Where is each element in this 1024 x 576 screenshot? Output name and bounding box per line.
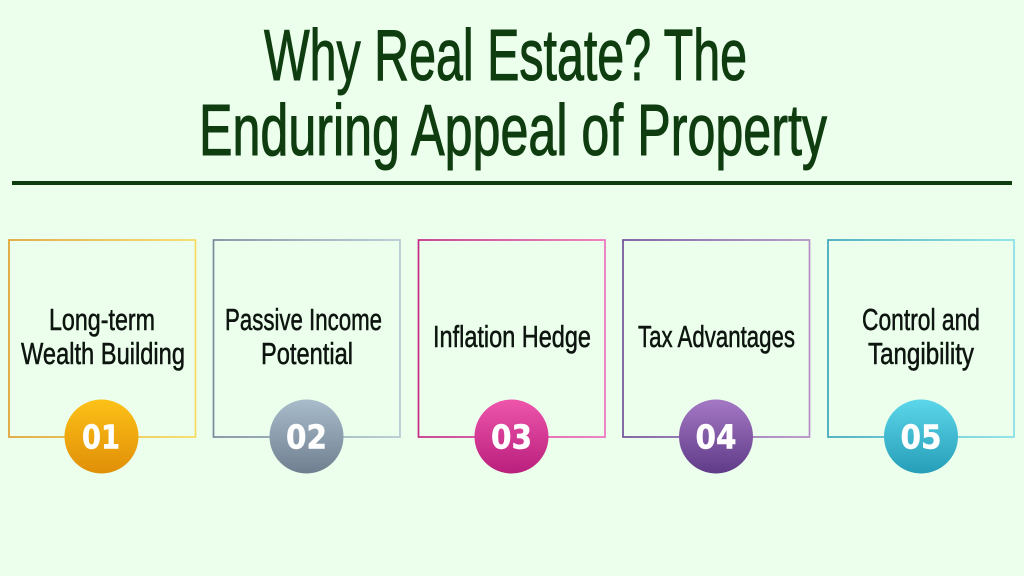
card text 5: Tangibility <box>868 336 974 371</box>
card border 4 <box>623 240 810 437</box>
number badge 02 <box>270 400 344 474</box>
card text 4: Tax Advantages <box>638 319 795 354</box>
panel: inflation hedge <box>418 240 605 474</box>
card text 3: Inflation Hedge <box>433 319 591 354</box>
card text 2: Passive Income <box>225 302 382 337</box>
number badge 01: 01 <box>82 418 120 456</box>
number badge 03: 03 <box>491 418 532 456</box>
card border 2 <box>214 240 400 437</box>
number badge 05: 05 <box>900 418 942 456</box>
number badge 02: 02 <box>286 418 327 456</box>
number badge 04: 04 <box>696 418 736 456</box>
card text 1: Wealth Building <box>21 336 185 371</box>
number badge 03 <box>474 400 548 474</box>
card border 3 <box>418 240 605 437</box>
card text 2 <box>225 302 382 371</box>
panel: tax advantages <box>623 240 810 474</box>
number badge 04 <box>679 400 753 474</box>
card text 5: Control and <box>862 302 980 337</box>
panel: long-term wealth building <box>9 240 196 474</box>
card text 5 <box>862 302 980 371</box>
card text 1 <box>21 302 185 371</box>
panel: control and tangibility <box>828 240 1014 474</box>
card text 1: Long-term <box>49 302 155 337</box>
title <box>199 16 827 171</box>
panel: passive income potential <box>214 240 400 474</box>
number badge 05 <box>884 400 958 474</box>
title divider <box>12 181 1012 185</box>
card border 1 <box>9 240 196 437</box>
title: Why Real Estate? The <box>264 16 747 96</box>
card border 5 <box>828 240 1014 437</box>
number badge 01 <box>64 400 138 474</box>
card text 2: Potential <box>261 336 353 371</box>
